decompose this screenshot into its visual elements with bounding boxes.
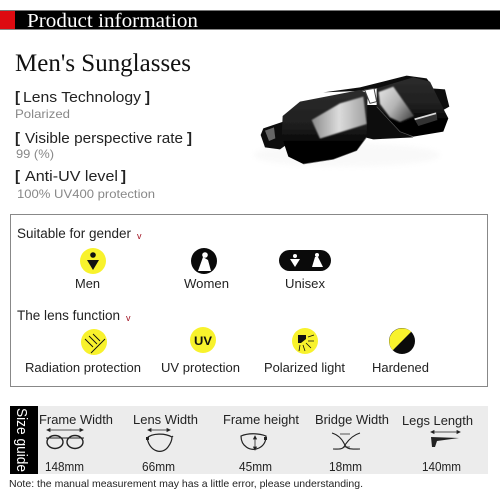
text block: specifications: Lens Technology [23, 90, 142, 106]
column: frame width: 148mm [45, 459, 84, 474]
label: hardened: Hardened [372, 360, 429, 375]
heading: suitable for gender: Suitable for gender [17, 226, 132, 241]
text block: specifications: 99 (%) [16, 147, 54, 161]
icon: women [191, 248, 217, 274]
column: frame height: Frame height [223, 412, 299, 427]
title: Men's Sunglasses [15, 50, 191, 77]
column: lens width: 66mm [142, 459, 175, 474]
text block: specifications: Visible perspective rate [25, 131, 183, 147]
column: frame height [223, 412, 299, 474]
heading: the lens function: The lens function [17, 308, 120, 323]
column: legs length: 140mm [422, 459, 461, 474]
icon: polarized light [292, 328, 318, 354]
column: frame height: 45mm [239, 459, 272, 474]
label: men: Men [75, 276, 100, 291]
text block: specifications: ] [121, 168, 126, 185]
text block: specifications: Polarized [15, 107, 70, 121]
header bar [0, 10, 500, 32]
column: lens width: Lens Width [133, 412, 198, 427]
text block: specifications: ] [187, 130, 192, 147]
icon: radiation protection [81, 329, 107, 355]
text block: specifications: [ [15, 168, 20, 185]
column: bridge width: Bridge Width [315, 412, 389, 427]
label: unisex: Unisex [285, 276, 325, 291]
text block: specifications: Anti-UV level [25, 169, 118, 185]
size guide label [10, 406, 38, 474]
column: legs length: Legs Length [402, 413, 473, 428]
column: frame width: Frame Width [39, 412, 113, 427]
text block: specifications: 100% UV400 protection [17, 187, 155, 201]
column: lens width [133, 412, 198, 474]
text block: specifications [15, 89, 192, 201]
icon: hardened [389, 328, 415, 354]
heading: the lens function: v [126, 313, 131, 323]
icon: uv protection [190, 327, 216, 353]
icon: men [80, 248, 106, 274]
label: radiation protection: Radiation protection [25, 360, 141, 375]
heading: suitable for gender: v [137, 231, 142, 241]
panel: size guide [10, 406, 488, 474]
icon: uv protection: UV [194, 336, 212, 348]
label: women: Women [184, 276, 229, 291]
text block: specifications: [ [15, 89, 20, 106]
column: legs length [402, 413, 473, 474]
note: Note: the manual measurement may has a little error, please understanding. [9, 478, 363, 490]
column: bridge width: 18mm [329, 459, 362, 474]
icon: unisex [279, 250, 331, 271]
header bar: Product information [27, 11, 198, 32]
size guide label: Size guide [13, 408, 29, 472]
label: uv protection: UV protection [161, 360, 240, 375]
panel: gender and lens function [10, 214, 488, 386]
text block: specifications: ] [145, 89, 150, 106]
label: polarized light: Polarized light [264, 360, 345, 375]
product photo: sunglasses [253, 76, 449, 167]
column: bridge width [315, 412, 389, 474]
column: frame width [39, 412, 113, 474]
text block: specifications: [ [15, 130, 20, 147]
